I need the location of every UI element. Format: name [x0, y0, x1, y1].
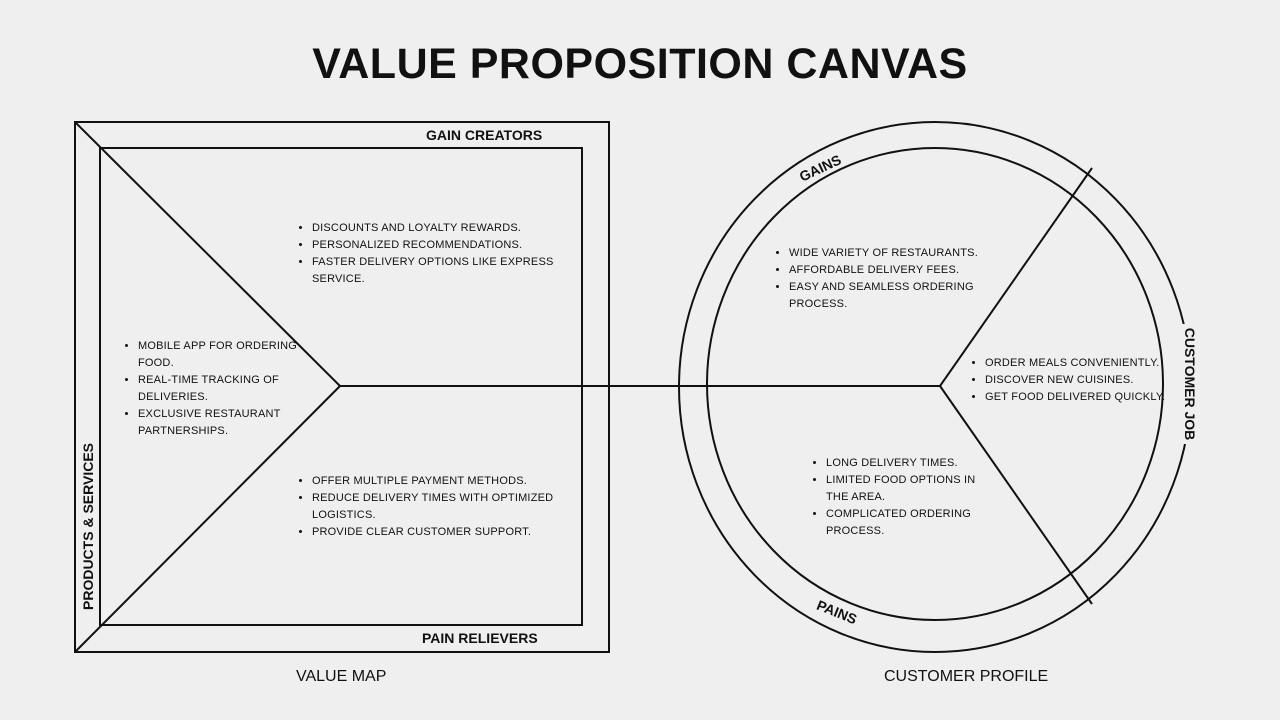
text: gains: AFFORDABLE DELIVERY FEES. [789, 264, 959, 276]
label: gain creators: GAIN CREATORS [426, 127, 542, 143]
text: gain creators: PERSONALIZED RECOMMENDATIONS. [312, 239, 522, 251]
text: pain relievers: REDUCE DELIVERY TIMES WITH OPTIMIZED LOGISTICS. [312, 492, 553, 521]
text: pains: LONG DELIVERY TIMES. [826, 457, 958, 469]
label: customer profile: CUSTOMER PROFILE [884, 668, 1048, 685]
text: pain relievers: PROVIDE CLEAR CUSTOMER SUPPORT. [312, 526, 531, 538]
text: pains [813, 457, 975, 537]
text: gain creators [299, 222, 554, 285]
text: products: EXCLUSIVE RESTAURANT PARTNERSHIPS. [138, 408, 280, 437]
text: gain creators: DISCOUNTS AND LOYALTY REWARDS. [312, 222, 521, 234]
text: gains: EASY AND SEAMLESS ORDERING PROCESS. [789, 281, 974, 310]
text: customer jobs: GET FOOD DELIVERED QUICKLY. [985, 391, 1165, 403]
label: pains: PAINS [815, 597, 859, 627]
text: gains [776, 247, 978, 310]
label: products & services: PRODUCTS & SERVICES [80, 443, 96, 610]
text: customer jobs: ORDER MEALS CONVENIENTLY. [985, 357, 1160, 369]
title: VALUE PROPOSITION CANVAS [312, 40, 968, 88]
text: pain relievers: OFFER MULTIPLE PAYMENT METHODS. [312, 475, 527, 487]
label: value map: VALUE MAP [296, 668, 386, 685]
text: products: REAL-TIME TRACKING OF DELIVERIES. [138, 374, 279, 403]
text: gain creators: FASTER DELIVERY OPTIONS LIKE EXPRESS SERVICE. [312, 256, 554, 285]
text: customer jobs: DISCOVER NEW CUISINES. [985, 374, 1134, 386]
text: products [125, 340, 297, 437]
text: pains: LIMITED FOOD OPTIONS IN THE AREA. [826, 474, 975, 503]
label: gains: GAINS [797, 151, 844, 185]
label: customer job: CUSTOMER JOB [1182, 328, 1198, 440]
text: products: MOBILE APP FOR ORDERING FOOD. [138, 340, 297, 369]
text: pain relievers [299, 475, 553, 538]
text: gains: WIDE VARIETY OF RESTAURANTS. [789, 247, 978, 259]
label: pain relievers: PAIN RELIEVERS [422, 630, 538, 646]
text: customer jobs [972, 357, 1165, 403]
text: pains: COMPLICATED ORDERING PROCESS. [826, 508, 971, 537]
